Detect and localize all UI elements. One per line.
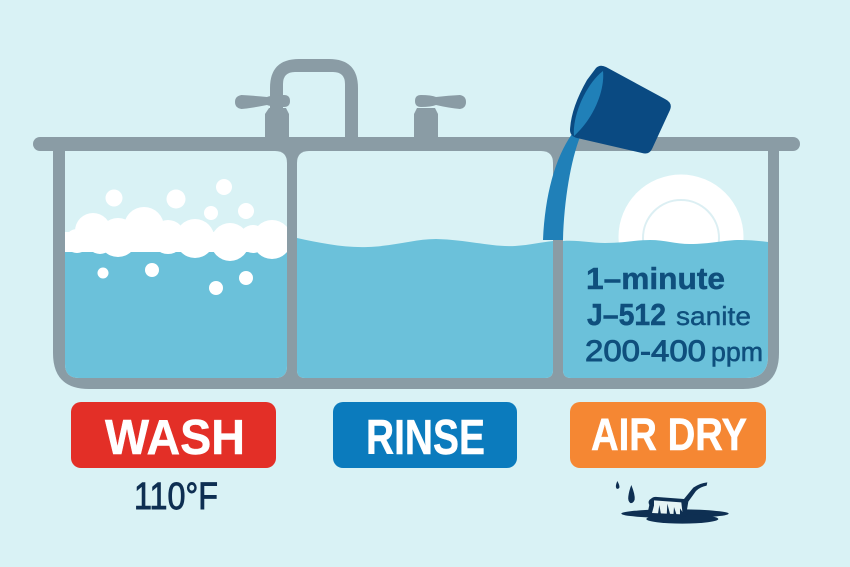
- sanitizer instructions: 200-400: [585, 335, 706, 368]
- bubbles: [98, 179, 254, 295]
- rinse water: [297, 238, 553, 378]
- sanitizer water: [563, 240, 768, 378]
- sanitizer instructions: 1–minute: [586, 261, 725, 296]
- label: wash: WASH: [105, 411, 245, 465]
- faucet: [235, 59, 466, 140]
- label: air dry: AIR DRY: [591, 409, 747, 460]
- label: rinse: RINSE: [366, 411, 485, 465]
- sanitizer instructions: sanite: [676, 301, 751, 331]
- label: rinse: [333, 402, 517, 468]
- compartment: wash: [65, 151, 292, 378]
- icon: pouring bucket: [570, 66, 671, 154]
- icon: plate: [618, 174, 744, 244]
- wash water: [65, 245, 287, 378]
- icon: right tap handle: [414, 95, 466, 140]
- label: air dry: [570, 402, 766, 468]
- soap foam: [65, 207, 292, 261]
- water stream: [543, 134, 580, 240]
- compartment: sanitize: [563, 151, 768, 378]
- compartment: rinse: [297, 151, 553, 378]
- sanitizer instructions: ppm: [711, 337, 763, 367]
- sink rim: [33, 137, 800, 151]
- icon: brush in puddle with drips: [616, 481, 729, 524]
- sanitizer instructions: [585, 261, 763, 368]
- sink basin: [53, 140, 779, 389]
- label: wash: [71, 402, 276, 468]
- icon: left tap handle: [235, 95, 290, 140]
- infographic: three-compartment sink: [33, 59, 800, 524]
- wash temperature: 110°F: [134, 476, 218, 518]
- sanitizer instructions: J–512: [587, 297, 666, 332]
